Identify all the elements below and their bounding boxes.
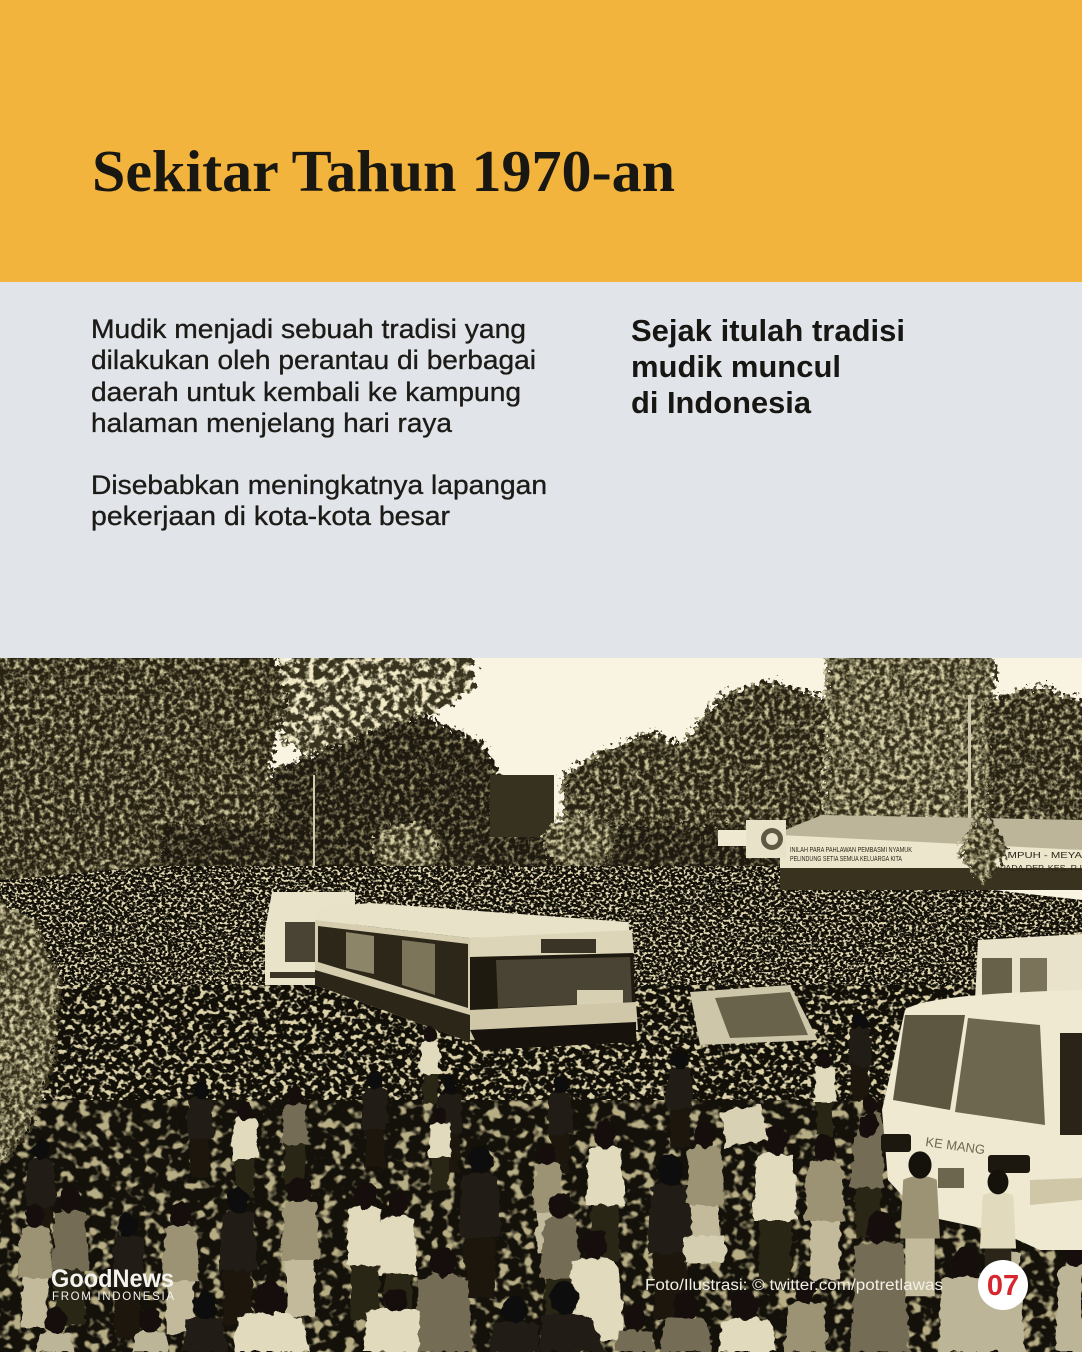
roadside shelter: PADA DEP. KES. R.I <box>1000 864 1082 873</box>
carried box <box>720 1104 768 1148</box>
page number badge <box>978 1260 1028 1310</box>
trees: bushes <box>374 822 442 874</box>
back bus <box>265 892 355 985</box>
logo: GoodNews from Indonesia: FROM INDONESIA <box>52 1291 174 1303</box>
front white bus: KE MANG <box>925 1134 986 1157</box>
trees: tall tree <box>825 640 995 825</box>
text block: definition of mudik: daerah untuk kembali ke kampung <box>91 377 521 407</box>
car <box>690 985 818 1045</box>
text block: definition of mudik: halaman menjelang hari raya <box>91 408 453 438</box>
main bus <box>315 903 638 1050</box>
text block: definition of mudik: dilakukan oleh perantau di berbagai <box>91 345 536 375</box>
trees: low background belt <box>155 820 793 866</box>
distant building <box>490 775 554 837</box>
crowd: far <box>0 866 1082 985</box>
foliage at left edge <box>0 890 60 1190</box>
trees: far right <box>985 685 1082 830</box>
roadside shelter: AMPUH - MEYA <box>1000 851 1082 860</box>
crowd: near <box>0 1100 1082 1352</box>
page number badge: 07 <box>987 1270 1019 1302</box>
text block: bold statement: mudik muncul <box>631 349 841 384</box>
title: Sekitar Tahun 1970-an <box>92 138 675 204</box>
logo: GoodNews from Indonesia: GoodNews <box>51 1265 174 1293</box>
text block: bold statement <box>631 313 905 420</box>
roadside shelter <box>718 805 1082 890</box>
roadside shelter: INILAH PARA PAHLAWAN PEMBASMI NYAMUK <box>790 847 912 854</box>
panel: grey text band <box>0 282 1082 658</box>
photo credit: Foto/Ilustrasi: © twitter.com/potretlawas <box>645 1277 943 1294</box>
front white bus <box>881 990 1082 1301</box>
photo: crowd and buses at a terminal <box>0 640 1082 1352</box>
crowd: front row <box>36 1212 1082 1352</box>
far right bus <box>975 934 1082 1000</box>
text block: cause: Disebabkan meningkatnya lapangan <box>91 470 547 500</box>
panel: yellow title band <box>0 0 1082 282</box>
lamp posts <box>313 775 315 870</box>
text block: cause <box>91 470 547 531</box>
roadside shelter: PELINDUNG SETIA SEMUA KELUARGA KITA <box>790 856 902 863</box>
trees: sparse branches <box>272 658 482 758</box>
text block: bold statement: di Indonesia <box>631 385 812 420</box>
crowd: middle <box>40 985 976 1100</box>
white bag <box>684 1236 726 1264</box>
text block: bold statement: Sejak itulah tradisi <box>631 313 905 348</box>
trees: right <box>555 674 830 831</box>
text block: cause: pekerjaan di kota-kota besar <box>91 501 450 531</box>
crowd: individual people <box>18 1012 1082 1352</box>
text block: definition of mudik: Mudik menjadi sebuah tradisi yang <box>91 314 526 344</box>
trees: centre dark tree <box>266 712 502 832</box>
sky <box>266 658 1082 900</box>
text block: definition of mudik <box>91 314 536 438</box>
trees: left mass <box>0 658 290 880</box>
